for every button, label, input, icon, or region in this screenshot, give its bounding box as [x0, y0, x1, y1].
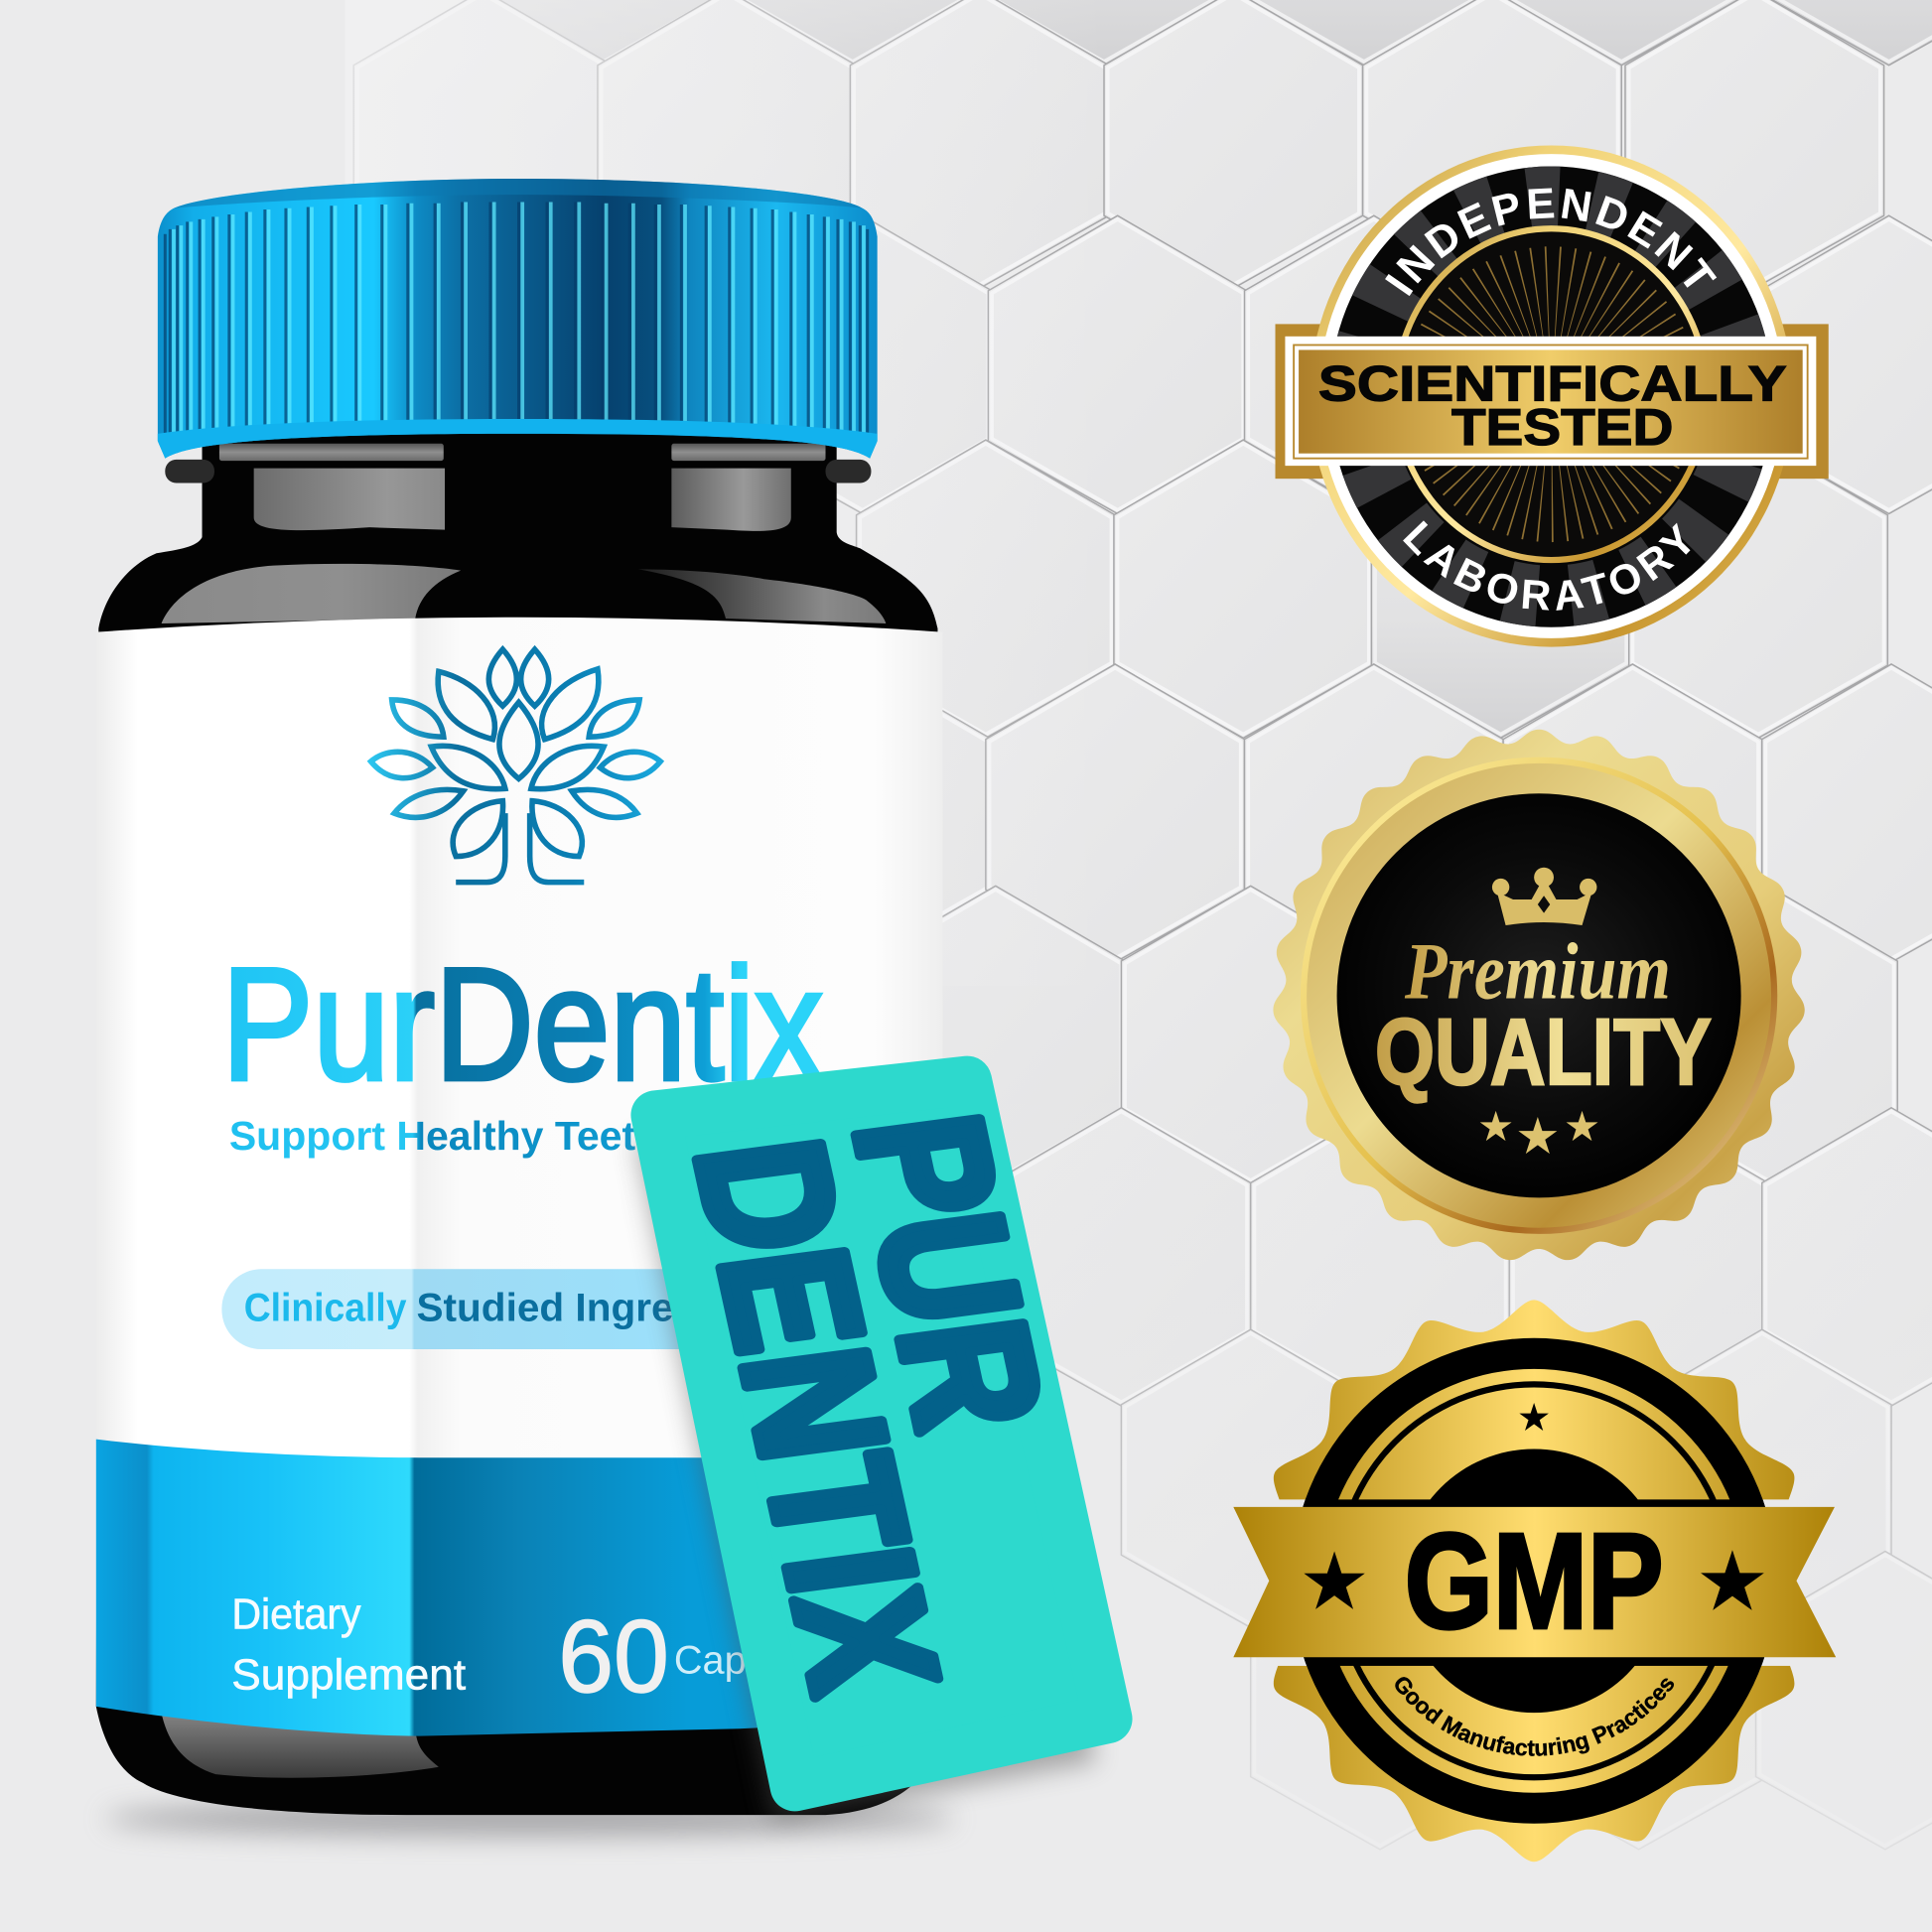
card text: DENTIX: DENTIX [656, 1128, 978, 1705]
starburst gold edge bottom [1273, 1666, 1795, 1863]
badge: GMP [1233, 1300, 1837, 1863]
product bottle [96, 179, 955, 1836]
pill: clinically studied: Clinically [244, 1286, 407, 1329]
three stars [1480, 1111, 1597, 1154]
scalloped gold edge [1273, 729, 1805, 1261]
bottle ground shadow [104, 1801, 955, 1836]
arc text: independent: INDEPENDENT [1385, 189, 1718, 296]
text: dietary supplement: Dietary [231, 1591, 361, 1639]
card: PurDentix strip [634, 1080, 1108, 1821]
ribbon stars [1304, 1550, 1764, 1610]
card shadow [634, 1097, 1097, 1821]
neck and shoulder reflections [160, 444, 886, 1778]
script: Premium: Premium [1404, 925, 1671, 1016]
text: dietary supplement [231, 1591, 466, 1700]
crown icon [1492, 868, 1596, 925]
text: 60 capsules: Capsules [674, 1638, 838, 1682]
card body [655, 1080, 1108, 1787]
cap [158, 179, 878, 459]
text: dietary supplement: Supplement [231, 1652, 466, 1700]
badge banner: SCIENTIFICALLY [1318, 355, 1787, 411]
text: 60 capsules: 60 [558, 1599, 669, 1715]
logo: tree of leaves [371, 649, 660, 883]
text: 60 capsules [558, 1599, 838, 1715]
text: GMP: GMP [1405, 1504, 1663, 1656]
neck lip [165, 460, 871, 483]
white label [96, 618, 942, 1478]
ribbon banner [1233, 1507, 1836, 1657]
badge banner: TESTED [1451, 399, 1673, 457]
pill: clinically studied: Studied Ingredients [416, 1286, 792, 1329]
badge inner sunburst [1392, 225, 1711, 563]
badge: independent laboratory scientifically tested [1275, 145, 1829, 647]
arc text: laboratory: LABORATORY [1403, 520, 1690, 611]
pill: clinically studied [221, 1269, 792, 1349]
top star [1519, 1403, 1549, 1431]
rings [1282, 1338, 1787, 1824]
starburst gold edge top [1273, 1300, 1795, 1499]
brand name: PurDentix [221, 935, 823, 1114]
badge gold back bar [1276, 324, 1829, 479]
badge outer rings [1310, 145, 1793, 647]
blue label band [96, 1440, 942, 1736]
badge banner [1285, 337, 1816, 466]
card text: PUR: PUR [815, 1104, 1082, 1441]
badge: premium quality [1273, 729, 1805, 1261]
gold ring [1304, 760, 1774, 1231]
tagline: Support Healthy Teeth [229, 1113, 660, 1159]
bottle body black glass [96, 425, 942, 1815]
text: QUALITY: QUALITY [1375, 1000, 1712, 1104]
arc text: good manufacturing practices: Good Manufacturing Practices [1395, 1677, 1674, 1756]
